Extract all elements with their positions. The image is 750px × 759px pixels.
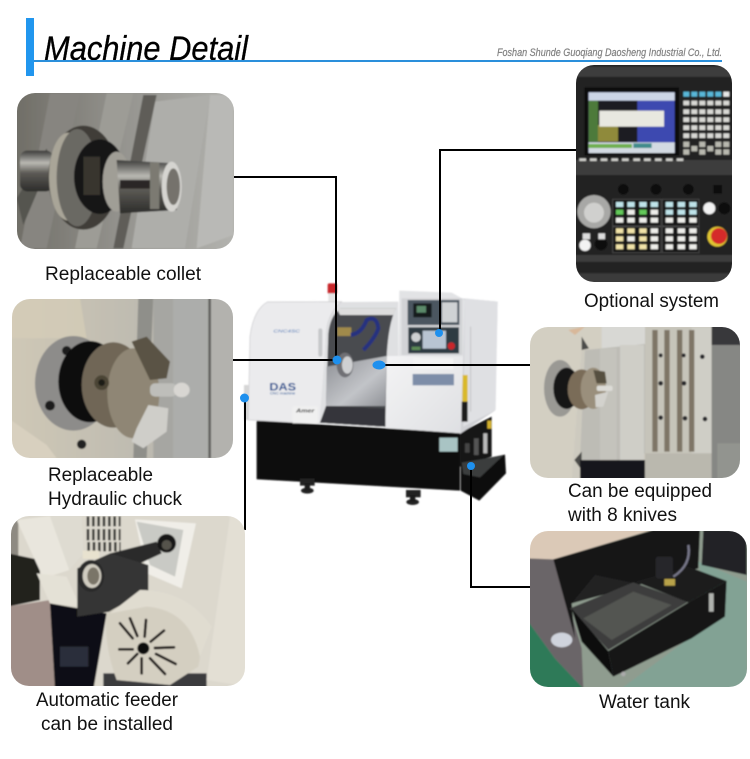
panel: optional system — [573, 63, 735, 312]
drawer — [461, 455, 506, 501]
caption: Automatic feeder — [36, 690, 179, 711]
caption: Can be equipped — [568, 481, 712, 502]
handwheel — [577, 195, 611, 228]
photo: collet — [13, 90, 237, 252]
caption — [36, 690, 179, 735]
caption: Water tank — [599, 692, 690, 713]
coolant hose — [351, 319, 378, 350]
base — [257, 421, 460, 491]
lower control area — [618, 184, 629, 195]
panel: hydraulic chuck — [8, 295, 238, 510]
collet body — [20, 151, 53, 191]
keys — [683, 92, 721, 97]
machine underside — [528, 528, 652, 559]
photo: tank — [528, 528, 750, 690]
fan cover — [106, 597, 201, 685]
caption — [567, 481, 712, 526]
machine photo — [244, 283, 506, 505]
window interior — [320, 308, 396, 427]
feet — [300, 478, 315, 486]
caption: Optional system — [584, 291, 719, 312]
feed window — [135, 519, 196, 588]
rail plate — [645, 327, 712, 453]
vents — [87, 521, 121, 547]
right front body — [386, 356, 463, 433]
caption: can be installed — [41, 714, 173, 735]
chuck — [544, 360, 576, 417]
marker dots — [240, 329, 475, 470]
machine photo: DAS — [269, 381, 296, 393]
connector lines — [233, 150, 576, 587]
logos: CNC4SC — [273, 329, 301, 335]
panel: automatic feeder — [8, 513, 248, 735]
panel: water tank — [528, 528, 750, 713]
tank — [570, 582, 688, 650]
caption — [48, 465, 182, 510]
screen — [584, 87, 679, 156]
cabinet — [50, 603, 107, 690]
caption: Replaceable — [48, 465, 153, 486]
caption: with 8 knives — [567, 505, 677, 526]
photo: control panel — [573, 63, 735, 285]
panel: replaceable collet — [13, 90, 237, 285]
machine photo: Amer — [295, 409, 315, 415]
control panels — [402, 298, 462, 355]
title accent bar — [26, 18, 34, 76]
photo: chuck — [8, 295, 238, 462]
button blocks — [613, 199, 661, 226]
left guard — [248, 302, 342, 423]
pump — [656, 557, 673, 578]
chuck body — [34, 336, 96, 432]
title: Machine Detail — [44, 30, 249, 68]
red light — [328, 283, 337, 294]
slide blocks — [580, 344, 645, 465]
photo: feeder — [8, 513, 248, 690]
machine photo: CNC machine — [270, 392, 296, 396]
spindle — [337, 353, 353, 377]
caption: Hydraulic chuck — [48, 489, 182, 510]
right side panel — [460, 298, 498, 434]
header rule — [34, 60, 722, 62]
feeder tube — [110, 541, 162, 564]
photo: turret — [528, 325, 742, 480]
power buttons — [703, 202, 715, 214]
panel: 8 knives — [528, 325, 742, 526]
caption: Replaceable collet — [45, 264, 202, 285]
header — [26, 18, 722, 76]
